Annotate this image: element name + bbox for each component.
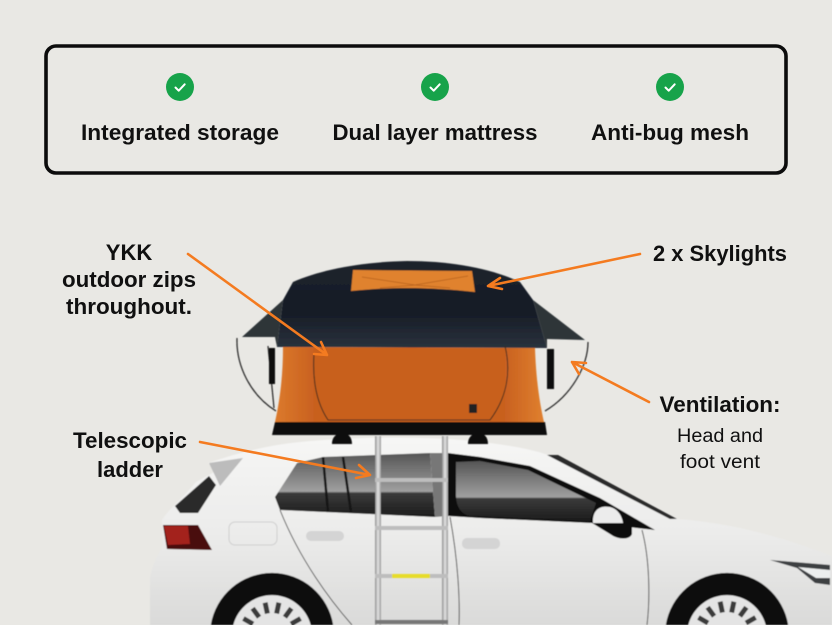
mounting feet bbox=[332, 433, 488, 444]
front wheel bbox=[666, 573, 788, 625]
feature: dual layer mattress bbox=[332, 73, 538, 145]
tent label tag bbox=[469, 404, 477, 413]
label: ventilation: Head and bbox=[677, 426, 763, 447]
feature: dual layer mattress: Dual layer mattress bbox=[332, 120, 538, 145]
side windows bbox=[275, 453, 435, 517]
label: ladder bbox=[73, 428, 187, 482]
label: ventilation: Ventilation: bbox=[660, 392, 780, 417]
rear hatch glass bbox=[175, 476, 216, 513]
label: zips: YKK bbox=[106, 240, 152, 265]
left strut bbox=[237, 338, 276, 411]
fuel cap bbox=[229, 522, 277, 545]
label: zips: outdoor zips bbox=[62, 267, 196, 292]
tent body bbox=[275, 347, 544, 422]
arrow: ventilation bbox=[572, 362, 649, 402]
tent wings bbox=[242, 300, 585, 348]
feature: integrated storage: Integrated storage bbox=[81, 120, 279, 145]
feature: integrated storage bbox=[81, 73, 279, 145]
feature: anti-bug mesh bbox=[591, 73, 749, 145]
tail light bbox=[163, 525, 212, 550]
panel: features bbox=[46, 46, 786, 173]
arrow: ladder bbox=[200, 442, 370, 478]
label: ladder: ladder bbox=[97, 457, 163, 482]
mirror bbox=[592, 523, 632, 538]
tent flysheet bbox=[277, 261, 547, 348]
tent bbox=[237, 261, 588, 444]
ladder bbox=[375, 436, 448, 625]
arrow: zips bbox=[188, 254, 327, 355]
headlight bbox=[770, 560, 830, 585]
windscreen bbox=[547, 455, 677, 519]
label: zips bbox=[62, 240, 196, 319]
skylight bbox=[351, 270, 475, 292]
label: ventilation bbox=[660, 392, 780, 473]
tent door outline bbox=[314, 346, 508, 420]
arrow: skylights bbox=[488, 254, 640, 289]
door handles bbox=[306, 531, 344, 541]
car bbox=[150, 438, 832, 625]
right strut bbox=[545, 342, 588, 411]
label: zips: throughout. bbox=[66, 294, 192, 319]
label: ventilation: foot vent bbox=[680, 452, 761, 473]
feature: anti-bug mesh: Anti-bug mesh bbox=[591, 120, 749, 145]
tent base bbox=[272, 422, 547, 435]
label: ladder: Telescopic bbox=[73, 428, 187, 453]
rear wheel bbox=[211, 573, 333, 625]
car body bbox=[150, 438, 832, 625]
label: skylights: 2 x Skylights bbox=[653, 241, 787, 266]
door lines bbox=[280, 510, 649, 625]
